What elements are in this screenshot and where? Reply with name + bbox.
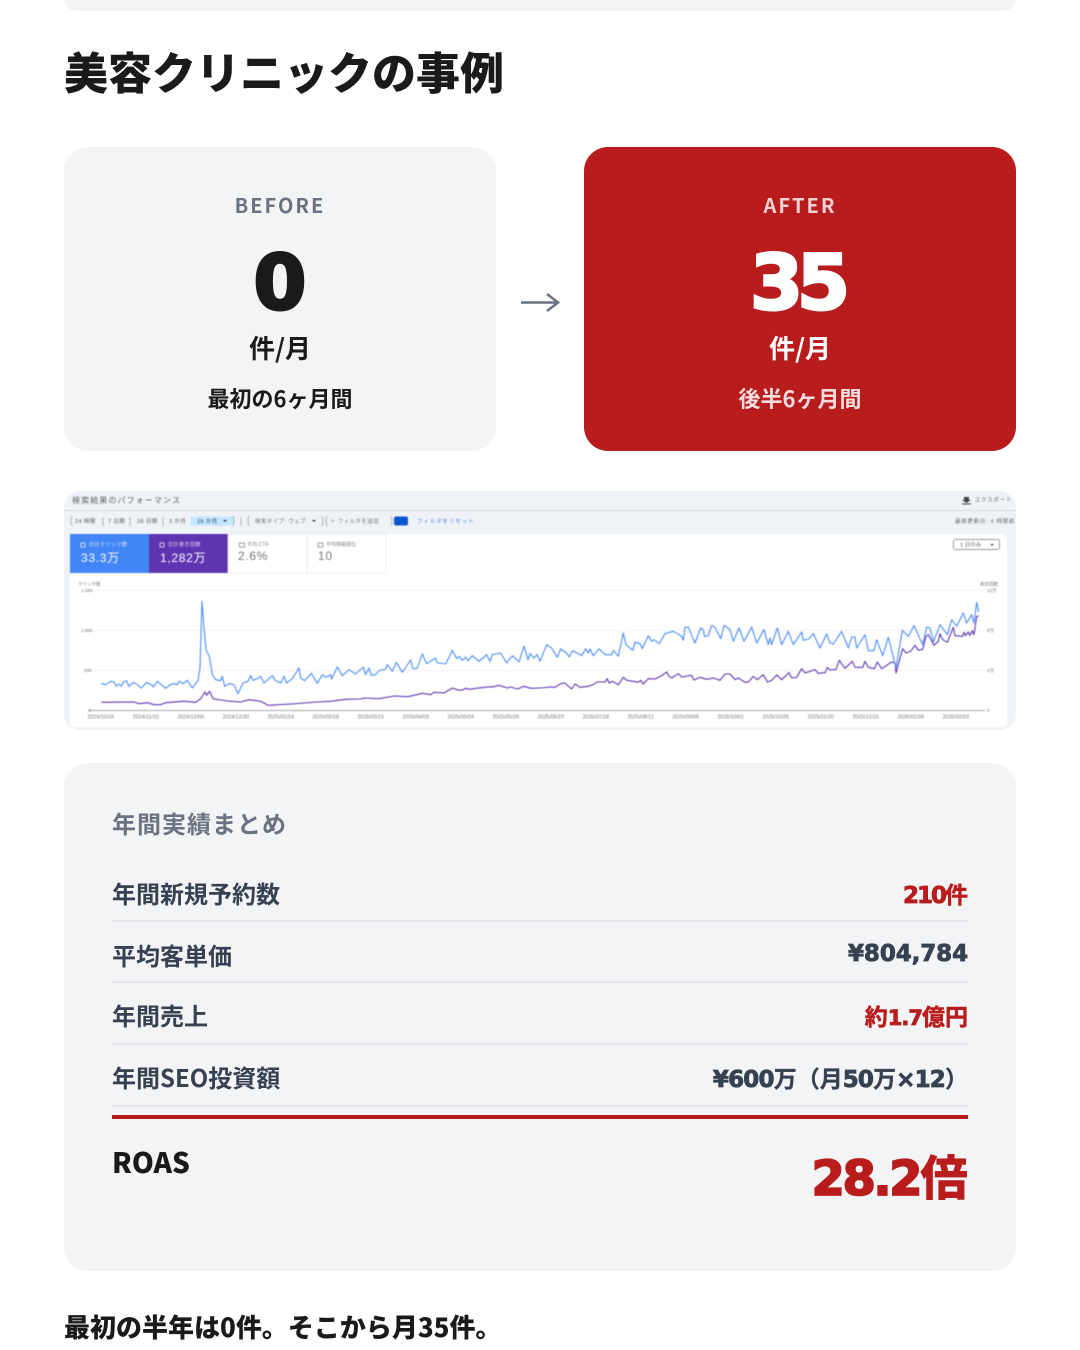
x axis date labels: 2024/12/05 (177, 714, 204, 720)
chart axes and gridlines (78, 580, 998, 713)
summary heading: 年間実績まとめ (112, 805, 287, 840)
x axis date labels: 2025/08/12 (627, 714, 654, 720)
chart axes and gridlines: 0 (987, 708, 990, 713)
before unit: 件/月 (249, 329, 311, 366)
chart axes and gridlines: 表示回数 (980, 580, 998, 588)
x axis date labels: 2024/10/16 (87, 714, 114, 720)
date range filters: ＋ フィルタを追加 (330, 517, 379, 525)
x axis date labels: 2025/10/26 (762, 714, 789, 720)
x axis date labels: 2025/09/06 (672, 714, 699, 720)
row: annual new reservations: 年間新規予約数 (112, 875, 280, 910)
roas divider (112, 1115, 968, 1119)
date range filters: 3 か月 (169, 518, 186, 525)
x axis date labels: 2026/01/09 (897, 714, 924, 720)
x axis date labels: 2026/02/03 (942, 714, 969, 720)
after label: AFTER (764, 190, 836, 219)
x axis date labels: 2025/05/29 (492, 714, 519, 720)
metric: average position: 平均掲載順位 (326, 541, 356, 548)
chart axes and gridlines: クリック数 (78, 580, 101, 588)
panel: before (64, 147, 496, 451)
x axis date labels: 2025/12/15 (852, 714, 879, 720)
chart axes and gridlines: 1,000 (81, 628, 93, 633)
roas label: ROAS (112, 1142, 190, 1182)
date range filters: 16 か月 (197, 518, 218, 525)
metric: total impressions: 合計表示回数 (168, 541, 201, 548)
row: average price (112, 937, 968, 983)
row: average price: 平均客単価 (112, 937, 232, 972)
date range filters: フィルタをリセット (417, 517, 474, 525)
roas value: 28.2倍 (812, 1139, 968, 1209)
before number: 0 (254, 238, 306, 327)
x axis date labels: 2025/05/04 (447, 714, 474, 720)
before label: BEFORE (235, 190, 325, 219)
row: annual seo investment: ¥600万（月50万×12） (713, 1060, 968, 1094)
export button: エクスポート (975, 496, 1012, 504)
export button (962, 496, 1012, 504)
row: annual sales: 約1.7億円 (865, 998, 968, 1032)
metric: average ctr: 2.6% (238, 549, 268, 563)
after period: 後半6ヶ月間 (738, 382, 861, 414)
row: annual seo investment (112, 1059, 968, 1107)
metric: total clicks (70, 534, 149, 573)
metric: average ctr: 平均 CTR (247, 541, 269, 548)
x axis date labels: 2025/07/18 (582, 714, 609, 720)
x axis date labels: 2024/11/10 (133, 714, 159, 720)
icon: arrow (521, 293, 560, 312)
chart axes and gridlines: 1,500 (81, 588, 93, 593)
line: clicks (101, 601, 979, 694)
x axis date labels: 2024/12/30 (222, 714, 249, 720)
date range filters: 28 日間 (137, 518, 158, 525)
chart axes and gridlines: 8万 (987, 628, 995, 634)
metric: average position: 10 (318, 549, 333, 563)
x axis date labels: 2025/06/23 (537, 714, 564, 720)
x axis date labels (87, 714, 969, 720)
x axis date labels: 2025/01/24 (267, 714, 294, 720)
screenshot heading: 検索結果のパフォーマンス (72, 495, 181, 505)
metric: total clicks: 33.3万 (81, 551, 120, 565)
x axis date labels: 2025/11/20 (808, 714, 834, 720)
x axis date labels: 2025/03/15 (357, 714, 384, 720)
panel: after (584, 147, 1016, 451)
date range filters: 検索タイプ: ウェブ (255, 517, 306, 525)
chart axes and gridlines: 0 (89, 708, 92, 713)
closing statement: 最初の半年は0件。そこから月35件。 (64, 1308, 502, 1345)
row: annual sales: 年間売上 (112, 997, 208, 1032)
x axis date labels: 2025/10/01 (717, 714, 744, 720)
metric: average position (307, 534, 386, 573)
granularity selector: 1 日のみ (960, 542, 982, 548)
line: impressions (101, 616, 979, 705)
previous panel bottom edge (64, 0, 1016, 11)
metric: average ctr (228, 534, 307, 573)
metric: total impressions: 1,282万 (160, 551, 206, 565)
date range filters: 最終更新日: 4 時間前 (955, 517, 1015, 525)
after unit: 件/月 (769, 329, 831, 366)
row: annual seo investment: 年間SEO投資額 (112, 1059, 280, 1094)
title: 美容クリニックの事例 (64, 38, 504, 102)
metric: total clicks: 合計クリック数 (89, 541, 128, 548)
date range filters (71, 516, 1015, 526)
x axis date labels: 2025/02/18 (312, 714, 339, 720)
row: annual new reservations (112, 875, 968, 922)
x axis date labels: 2025/04/09 (402, 714, 429, 720)
date range filters: 7 日間 (108, 518, 125, 525)
row: annual new reservations: 210件 (903, 876, 968, 910)
date range filters: 24 時間 (75, 517, 96, 525)
chart axes and gridlines: 500 (84, 668, 92, 673)
granularity selector (954, 540, 1000, 550)
chart axes and gridlines: 4万 (987, 668, 995, 674)
panel: annual summary (64, 763, 1016, 1271)
metric: total impressions (149, 534, 228, 573)
row: average price: ¥804,784 (848, 941, 968, 967)
chart axes and gridlines: 12万 (987, 588, 997, 594)
row: annual sales (112, 997, 968, 1045)
after number: 35 (750, 238, 844, 327)
before period: 最初の6ヶ月間 (208, 382, 352, 414)
chart: search performance screenshot (64, 491, 1016, 730)
